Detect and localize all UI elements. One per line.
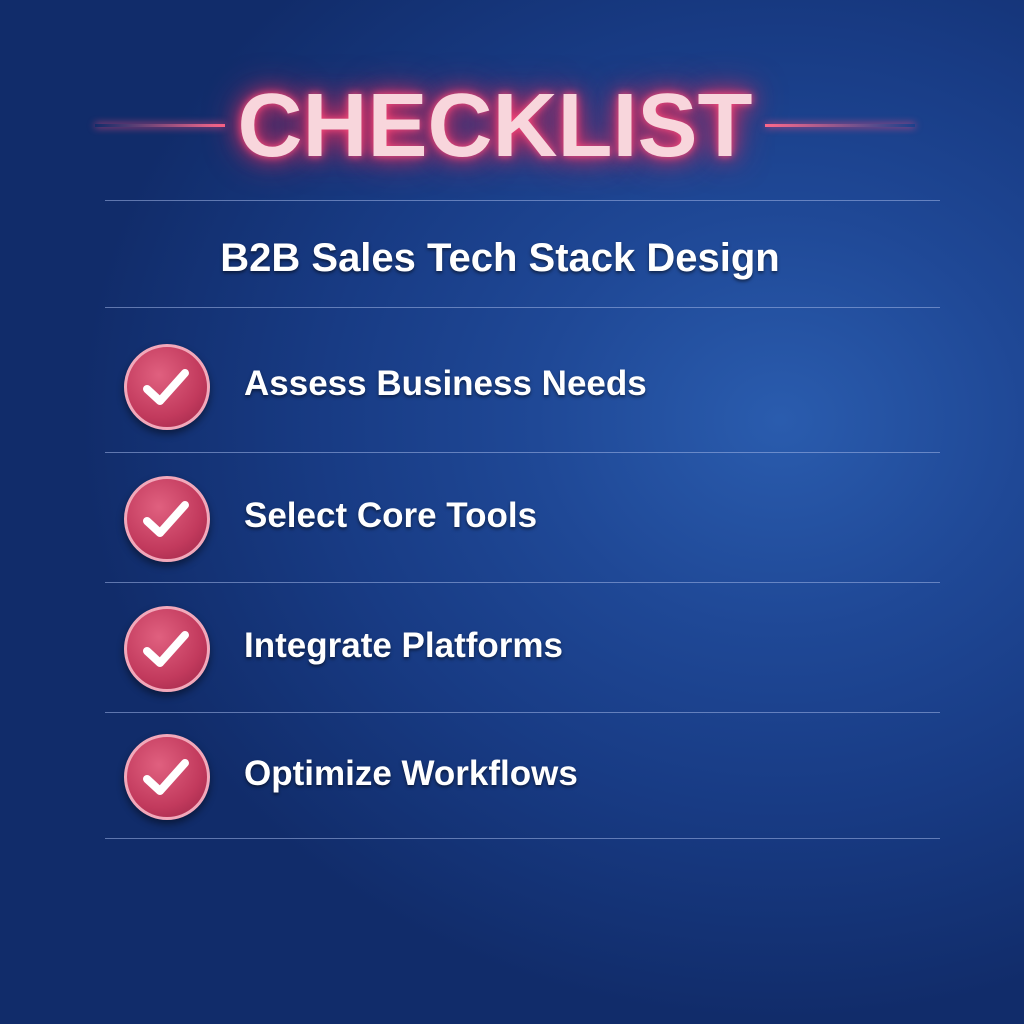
item 2: [120, 476, 538, 570]
item 4: [120, 734, 578, 828]
icon: check: [124, 344, 210, 430]
item 1: [120, 344, 647, 438]
icon: check: [124, 606, 210, 692]
title glow line left: [95, 124, 225, 127]
item 3: [120, 606, 564, 700]
icon: check: [124, 734, 210, 820]
item 3: Integrate Platforms: [244, 626, 563, 665]
item 4: Optimize Workflows: [244, 754, 578, 793]
title glow line right: [765, 124, 915, 127]
title: CHECKLIST: [238, 76, 752, 176]
item 1: Assess Business Needs: [244, 364, 647, 403]
icon: check: [124, 476, 210, 562]
item 2: Select Core Tools: [244, 496, 537, 535]
subtitle: B2B Sales Tech Stack Design: [220, 236, 780, 280]
